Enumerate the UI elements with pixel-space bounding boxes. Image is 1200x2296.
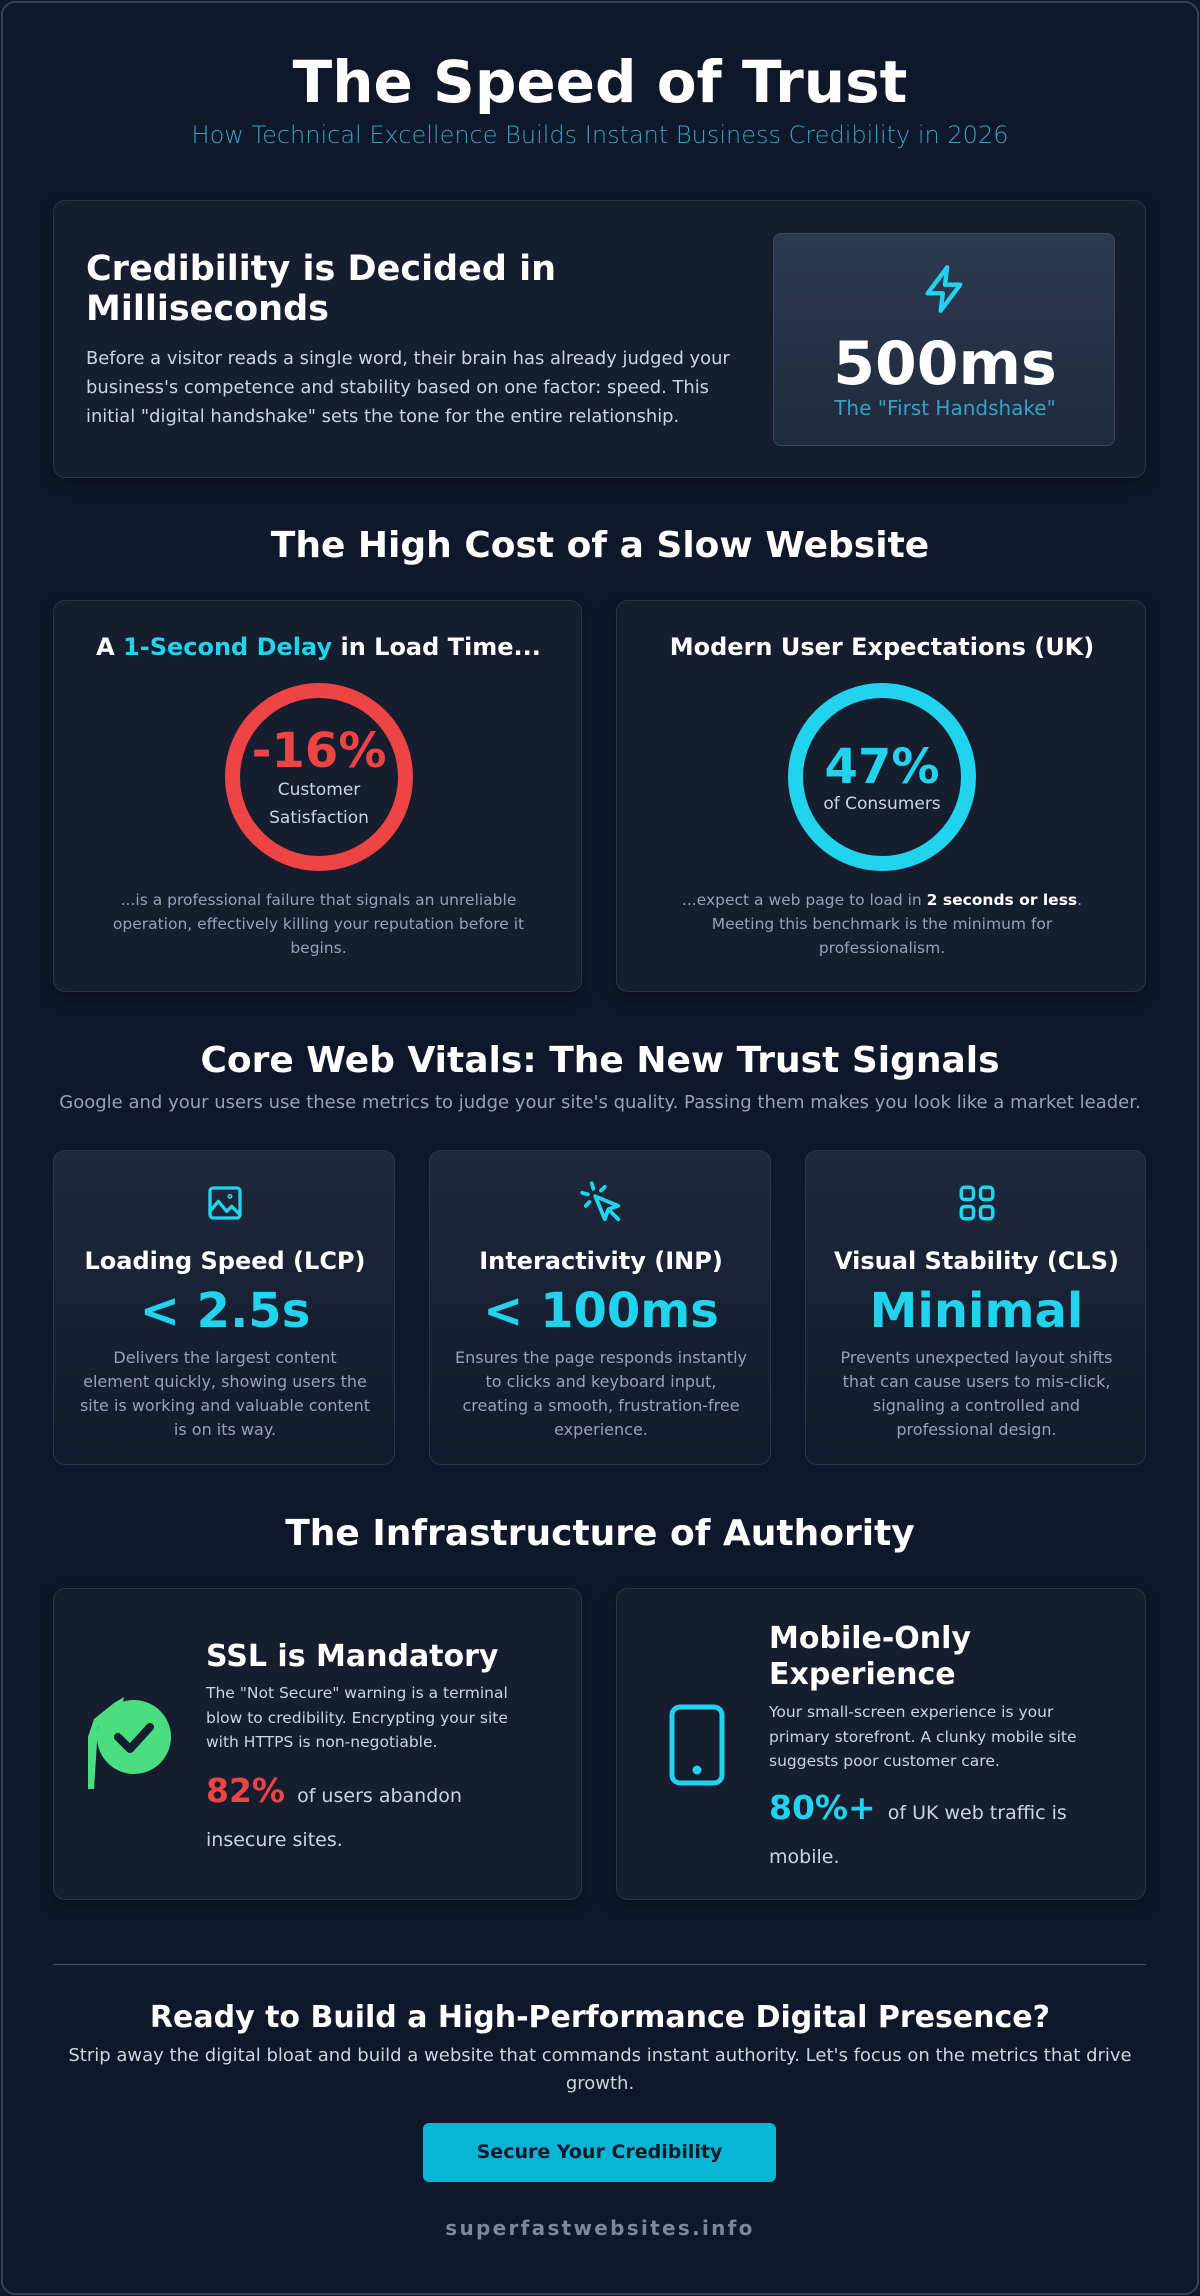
caption: ...expect a web page to load in 2 seconds or less. Meeting this benchmark is the minimum for professionalism. (682, 891, 1082, 957)
heading: high cost: The High Cost of a Slow Website (271, 525, 929, 566)
panel: SSL (53, 1588, 582, 1900)
ring chart: of Consumers (823, 794, 941, 814)
body text: Before a visitor reads a single word, their brain has already judged your business's competence and stability based on one factor: speed. This initial "digital handshake" sets the tone for the entire relationship. (86, 348, 730, 427)
icon: grid (960, 1186, 994, 1220)
panel: 1-second delay (53, 600, 582, 992)
description: Prevents unexpected layout shifts that can cause users to mis-click, signaling a controlled and professional design. (841, 1348, 1112, 1439)
card heading: Modern User Expectations (UK) (670, 633, 1094, 661)
icon: SSL badge (88, 1697, 171, 1789)
caption: The "First Handshake" (834, 396, 1056, 420)
panel: credibility intro (53, 200, 1146, 478)
heading: core web vitals: Core Web Vitals: The New Trust Signals (200, 1040, 1000, 1081)
subtitle: How Technical Excellence Builds Instant Business Credibility in 2026 (192, 121, 1008, 149)
stat: 82%: 82% of users abandon insecure sites. (206, 1771, 462, 1851)
CTA text: Strip away the digital bloat and build a website that commands instant authority. Let's focus on the metrics that drive growth. (68, 2045, 1132, 2094)
value: < 2.5s (140, 1283, 310, 1339)
title: Mobile-Only Experience (769, 1621, 971, 1692)
ring chart: Satisfaction (269, 808, 369, 828)
title: Loading Speed (LCP) (84, 1247, 366, 1275)
icon: image (208, 1186, 242, 1220)
title: Visual Stability (CLS) (834, 1247, 1119, 1275)
ring chart: Customer (278, 780, 360, 800)
ring chart (225, 683, 413, 871)
stat: 80%+: 80%+ of UK web traffic is mobile. (769, 1788, 1067, 1868)
ring chart: 47% (825, 739, 939, 795)
value: Minimal (870, 1283, 1083, 1339)
icon: pointer click (580, 1181, 620, 1222)
text: The "Not Secure" warning is a terminal blow to credibility. Encrypting your site with HTTPS is non-negotiable. (206, 1684, 508, 1751)
title: Interactivity (INP) (479, 1247, 723, 1275)
title: The Speed of Trust (293, 48, 907, 116)
description: Ensures the page responds instantly to clicks and keyboard input, creating a smooth, frustration-free experience. (455, 1348, 747, 1439)
stat box: 500ms (773, 233, 1115, 446)
value: < 100ms (483, 1283, 719, 1339)
title: SSL is Mandatory (206, 1639, 498, 1674)
panel: user expectations (616, 600, 1146, 992)
card heading: A 1-Second Delay in Load Time... (96, 633, 541, 661)
caption: ...is a professional failure that signals an unreliable operation, effectively killing your reputation before it begins. (113, 891, 524, 957)
description: Delivers the largest content element quickly, showing users the site is working and valuable content is on its way. (80, 1348, 370, 1439)
button: Secure Your Credibility (477, 2141, 722, 2163)
CTA heading: Ready to Build a High-Performance Digital Presence? (150, 2000, 1050, 2035)
subheading: Google and your users use these metrics to judge your site's quality. Passing them makes you look like a market leader. (59, 1092, 1141, 1113)
panel: LCP (53, 1150, 395, 1465)
heading: Credibility is Decided in Milliseconds (86, 249, 556, 329)
panel: mobile (616, 1588, 1146, 1900)
ring chart (788, 683, 976, 871)
value: 500ms (833, 329, 1057, 399)
panel: INP (429, 1150, 771, 1465)
footer: superfastwebsites.info (445, 2216, 755, 2240)
icon: lightning (926, 265, 962, 313)
ring chart: -16% (252, 723, 386, 779)
button (423, 2123, 776, 2182)
text: Your small-screen experience is your primary storefront. A clunky mobile site suggests poor customer care. (769, 1703, 1077, 1770)
icon: phone (670, 1704, 724, 1786)
panel: CLS (805, 1150, 1146, 1465)
heading: infrastructure: The Infrastructure of Authority (285, 1513, 915, 1554)
